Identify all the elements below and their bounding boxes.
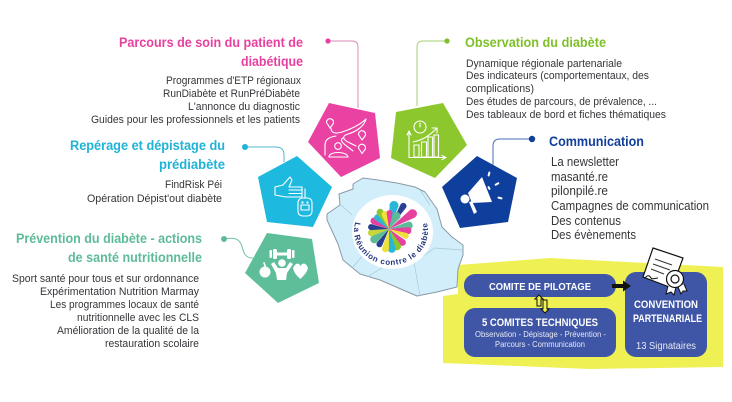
pentagon: communication — [442, 156, 517, 228]
icon: sport, apple and heart — [260, 249, 308, 280]
text block: parcours de soin list: Guides pour les professionnels et les patients — [91, 114, 300, 126]
text block: prévention list: Expérimentation Nutrition Marmay — [40, 286, 199, 298]
box: comités techniques: Parcours - Communication — [495, 340, 585, 349]
text block: communication list — [551, 155, 709, 242]
text block: repérage list: Opération Dépist'out diabète — [87, 193, 222, 205]
text block: observation list: Des tableaux de bord et fiches thématiques — [466, 109, 666, 121]
pentagon: repérage — [258, 156, 332, 227]
text block: communication list: Des contenus — [551, 214, 621, 228]
pentagon: parcours de soin — [308, 103, 380, 177]
heading: parcours de soin: diabétique — [241, 54, 303, 69]
arrow: double vertical — [535, 295, 549, 313]
text block: parcours de soin list: RunDiabète et RunPréDiabète — [163, 88, 300, 100]
text block: parcours de soin list: Programmes d'ETP régionaux — [166, 75, 301, 87]
panel: prévention text — [12, 231, 202, 350]
panel: parcours de soin text — [91, 35, 303, 126]
box: comités techniques: 5 COMITES TECHNIQUES — [482, 317, 598, 329]
box: comités techniques — [464, 308, 616, 357]
yellow background panel — [443, 258, 723, 369]
text block: observation list: Des études de parcours, de prévalence, ... — [466, 96, 657, 108]
box: comité de pilotage — [464, 274, 616, 297]
text block: observation list: Dynamique régionale partenariale — [466, 58, 622, 70]
icon: bar chart and gauge — [407, 121, 446, 160]
heading: prévention du diabète: Prévention du diabète - actions — [16, 231, 202, 246]
connector: green — [417, 38, 450, 106]
text block: communication list: La newsletter — [551, 155, 619, 169]
pentagon: observation — [391, 103, 467, 178]
text block: prévention list: restauration scolaire — [105, 338, 199, 350]
box: convention partenariale: PARTENARIALE — [633, 313, 702, 325]
connector: navy — [493, 136, 535, 166]
text block: observation list: complications) — [466, 83, 534, 95]
panel: repérage text — [70, 138, 225, 205]
text block: communication list: Des évènements — [551, 228, 636, 242]
connector: teal — [221, 236, 253, 258]
text block: prévention list — [12, 273, 200, 350]
text block: repérage list: FindRisk Péi — [165, 179, 222, 191]
text block: prévention list: Sport santé pour tous et sur ordonnance — [12, 273, 199, 285]
heading: prévention du diabète — [16, 231, 202, 265]
heading: communication: Communication — [549, 134, 644, 149]
text block: repérage list — [87, 179, 222, 205]
text block: prévention list: Amélioration de la qualité de la — [57, 325, 200, 337]
icon: route with pins — [325, 119, 366, 157]
text block: observation list — [466, 58, 666, 121]
heading: repérage et dépistage: Repérage et dépistage du — [70, 138, 225, 153]
text block: communication list: pilonpilé.re — [551, 184, 608, 198]
text block: parcours de soin list — [91, 75, 301, 126]
panel: observation text — [465, 35, 666, 121]
heading: repérage et dépistage: prédiabète — [159, 157, 225, 172]
logo circular text: La Réunion contre le diabète — [354, 222, 428, 265]
arrow: pilotage to convention — [612, 280, 631, 292]
heading: parcours de soin: Parcours de soin du patient de — [119, 35, 303, 50]
connector: cyan — [242, 144, 284, 162]
box: comité de pilotage: COMITE DE PILOTAGE — [489, 281, 591, 293]
icon: certificate with seal — [643, 248, 687, 295]
pentagon: prévention — [245, 233, 319, 303]
panel: communication text — [549, 134, 709, 242]
heading: repérage et dépistage — [70, 138, 225, 172]
text block: communication list: Campagnes de communication — [551, 199, 709, 213]
box: convention partenariale: 13 Signataires — [636, 340, 696, 352]
heading: prévention du diabète: de santé nutritionnelle — [68, 250, 202, 265]
text block: prévention list: nutritionnelle avec les CLS — [77, 312, 199, 324]
map: La Réunion island — [326, 178, 464, 296]
connector: pink — [325, 38, 358, 108]
heading: parcours de soin — [119, 35, 303, 69]
box: convention partenariale: CONVENTION — [634, 299, 698, 311]
icon: finger and glucose meter — [275, 177, 312, 216]
logo petals — [367, 200, 419, 253]
text block: observation list: Des indicateurs (comportementaux, des — [466, 70, 649, 82]
box: comités techniques: Observation - Dépistage - Prévention - — [475, 330, 606, 339]
text block: communication list: masanté.re — [551, 170, 608, 184]
text block: prévention list: Les programmes locaux de santé — [50, 299, 199, 311]
heading: observation du diabète: Observation du diabète — [465, 35, 606, 50]
text block: parcours de soin list: L'annonce du diagnostic — [188, 101, 300, 113]
icon: megaphone — [460, 171, 503, 214]
box: convention partenariale — [625, 272, 707, 357]
